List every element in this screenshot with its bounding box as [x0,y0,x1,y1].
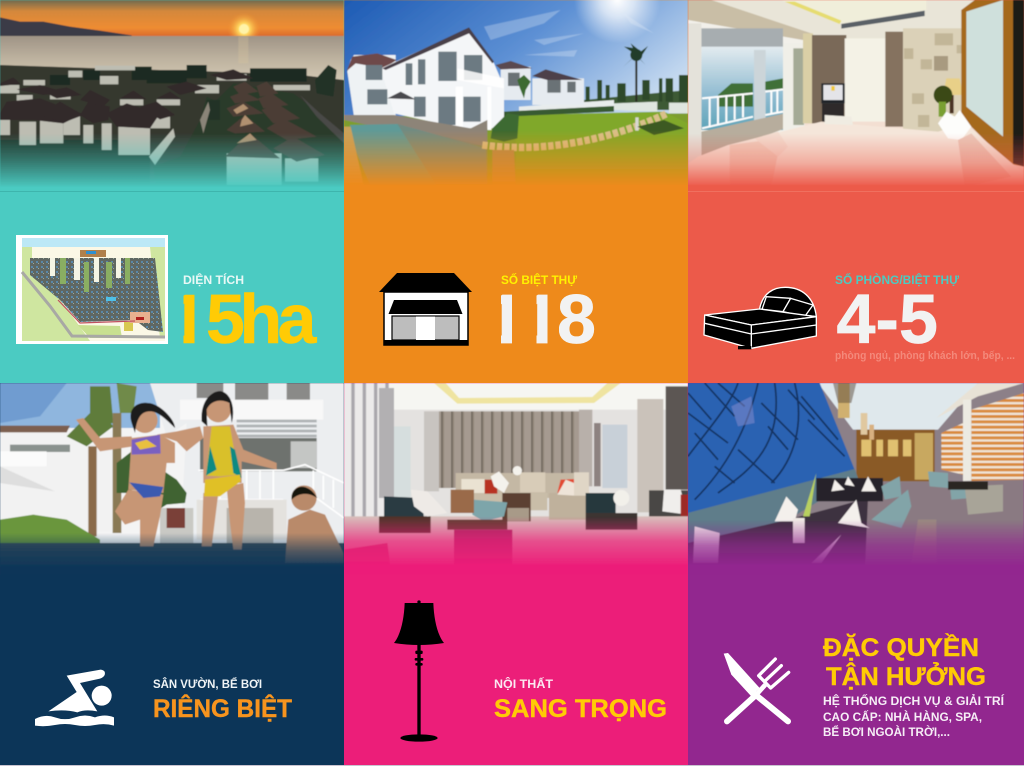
heading: exclusive privileges [823,633,986,691]
kid 1 [76,408,203,546]
heading: luxurious: SANG TRỌNG [494,695,667,723]
icon: villa [379,273,472,345]
icon: floor lamp [394,600,444,742]
panel: rooms per villa [688,0,1024,383]
main villa [347,55,396,117]
icon: swimmer [35,670,114,726]
text block: services list [823,694,1005,739]
photo: bedroom [688,0,1024,195]
icon: bed [704,287,816,349]
kid 3 [291,485,317,511]
icon: knife and fork [724,653,789,721]
panel: villa count [344,0,688,383]
panel: privileges [688,383,1024,766]
text block: services list: BỂ BƠI NGOÀI TRỜI,... [823,726,950,739]
heading: exclusive privileges: TẬN HƯỞNG [826,661,986,691]
label: area: DIỆN TÍCH [183,274,244,287]
label: garden and pool: SÂN VƯỜN, BỂ BƠI [153,678,262,691]
panel: luxury interior [344,383,688,766]
label: interior: NỘI THẤT [494,678,553,691]
kid 2 [202,397,277,550]
value: 4-5: 4-5 [836,280,938,358]
note: room types: phòng ngủ, phòng khách lớn, bếp, ... [835,350,1015,362]
photo: sunset over resort [0,0,344,195]
photo: white villa with pool and lawn [344,0,688,195]
label: villa count: SỐ BIỆT THỰ [501,273,577,287]
value: 15ha: 15ha [168,280,318,358]
panel: private garden and pool [0,383,344,766]
chairs [384,496,424,520]
heading: exclusive privileges: ĐẶC QUYỀN [823,633,979,662]
text block: services list: HỆ THỐNG DỊCH VỤ & GIẢI TRÍ [823,694,1005,708]
photo: children jumping into the pool [0,383,344,578]
photo: restaurant [688,383,1024,578]
photo: living room [344,383,688,578]
label: rooms per villa: SỐ PHÒNG/BIỆT THỰ [835,273,959,287]
text block: services list: CAO CẤP: NHÀ HÀNG, SPA, [823,711,982,724]
site map thumbnail [16,235,168,344]
heading: private: RIÊNG BIỆT [153,693,292,723]
panel: land area [0,0,344,383]
value: 118: 118 [486,280,596,358]
back villas [501,67,531,100]
